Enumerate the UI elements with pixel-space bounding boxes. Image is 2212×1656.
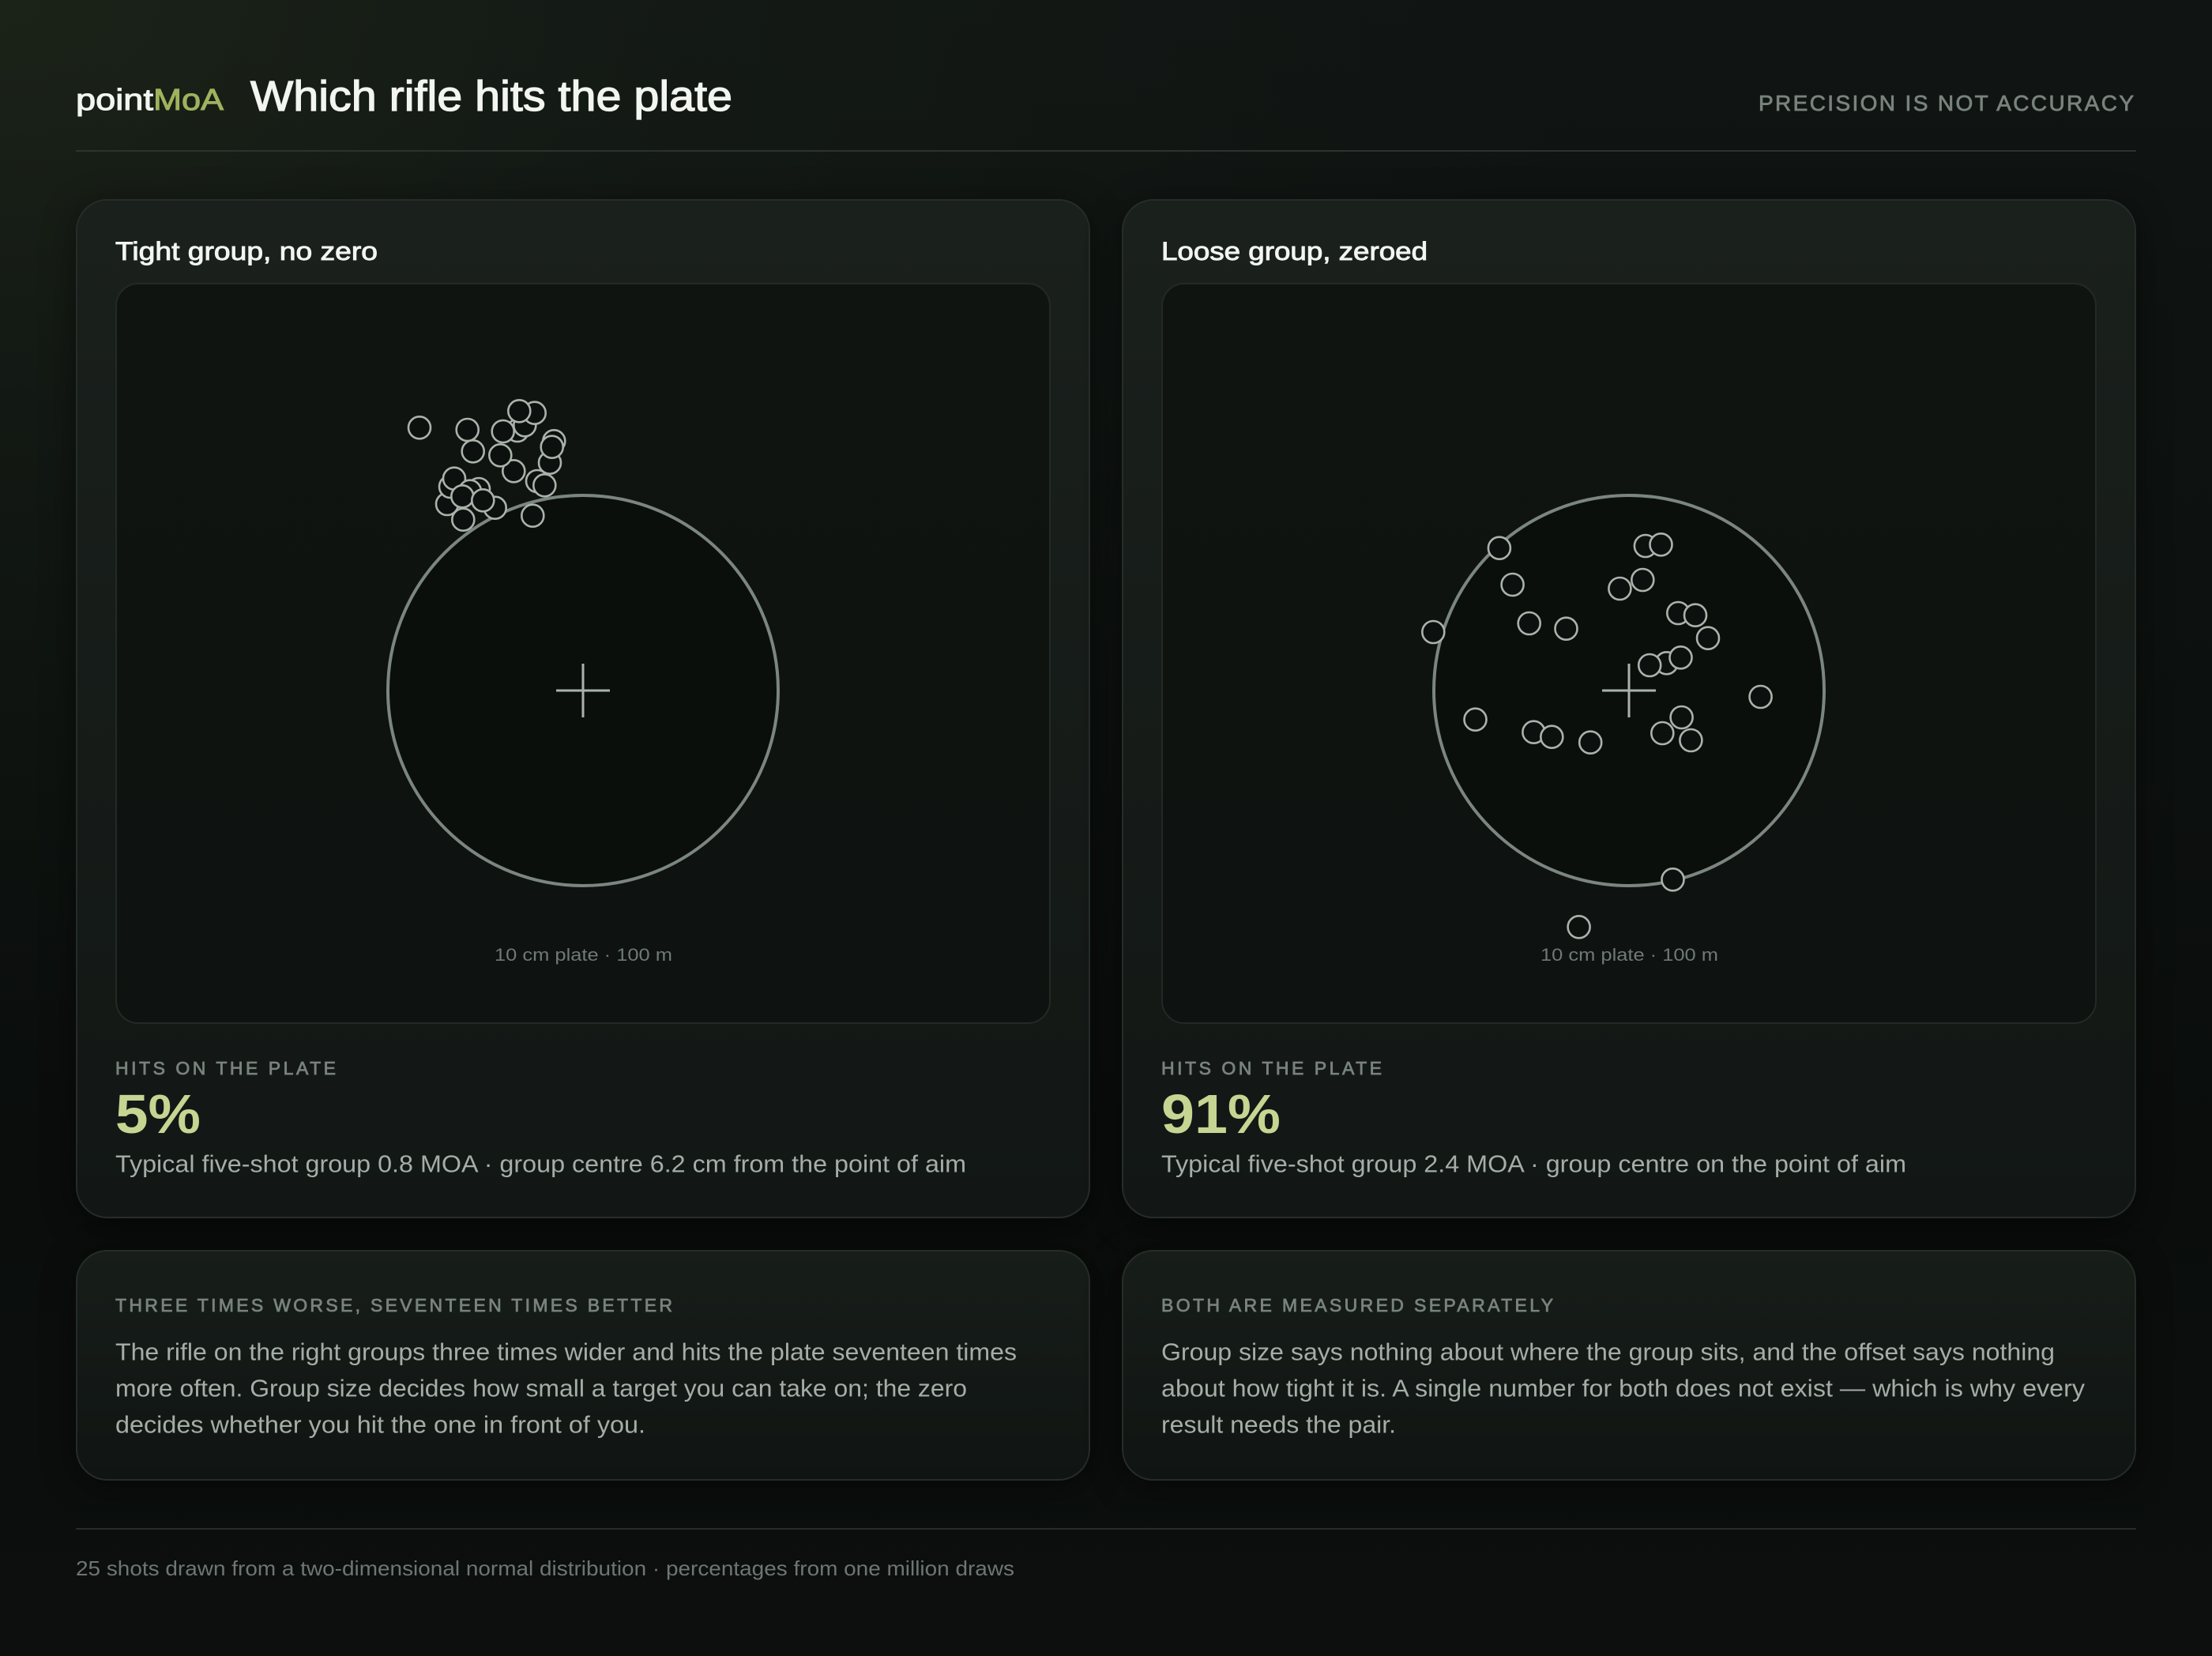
note: three times worse: [76, 1250, 1090, 1481]
note body: [115, 1338, 1017, 1438]
note body: result needs the pair.: [1161, 1411, 1396, 1438]
panel: loose group, zeroed: [1122, 199, 2136, 1218]
target panel: [1162, 284, 2096, 1023]
stat value: 5%: [115, 1083, 201, 1145]
title: Which rifle hits the plate: [250, 73, 732, 120]
logo: point: [76, 84, 154, 117]
panel: tight group, no zero: [76, 199, 1090, 1218]
shots: [1422, 533, 1772, 938]
plate caption: 10 cm plate · 100 m: [495, 945, 672, 965]
plate: [1434, 495, 1824, 886]
note body: decides whether you hit the one in front of you.: [115, 1411, 645, 1438]
stat label: HITS ON THE PLATE: [1161, 1058, 1382, 1078]
plate caption: 10 cm plate · 100 m: [1540, 945, 1718, 965]
logo: MoA: [153, 84, 224, 117]
tagline: PRECISION IS NOT ACCURACY: [1759, 91, 2134, 115]
panel heading: Loose group, zeroed: [1161, 237, 1428, 265]
note body: The rifle on the right groups three times wider and hits the plate seventeen times: [115, 1338, 1017, 1365]
stat label: HITS ON THE PLATE: [115, 1058, 336, 1078]
note body: more often. Group size decides how small a target you can take on; the zero: [115, 1375, 967, 1402]
panel heading: Tight group, no zero: [115, 237, 378, 265]
header: [76, 73, 2136, 152]
shots: [408, 400, 565, 531]
stat description: Typical five-shot group 0.8 MOA · group centre 6.2 cm from the point of aim: [115, 1150, 966, 1177]
crosshair: [556, 664, 610, 717]
note body: Group size says nothing about where the group sits, and the offset says nothing: [1161, 1338, 2055, 1365]
stat value: 91%: [1161, 1083, 1281, 1145]
stat description: Typical five-shot group 2.4 MOA · group centre on the point of aim: [1161, 1150, 1906, 1177]
note: both are measured separately: [1122, 1250, 2136, 1481]
logo: [76, 84, 224, 117]
target panel: [116, 284, 1050, 1023]
note body: [1161, 1338, 2086, 1438]
crosshair: [1602, 664, 1656, 717]
footnote: 25 shots drawn from a two-dimensional normal distribution · percentages from one million draws: [76, 1556, 1014, 1580]
plate: [388, 495, 778, 886]
note body: about how tight it is. A single number for both does not exist — which is why every: [1161, 1375, 2086, 1402]
note heading: THREE TIMES WORSE, SEVENTEEN TIMES BETTER: [115, 1295, 672, 1315]
note heading: BOTH ARE MEASURED SEPARATELY: [1161, 1295, 1553, 1315]
